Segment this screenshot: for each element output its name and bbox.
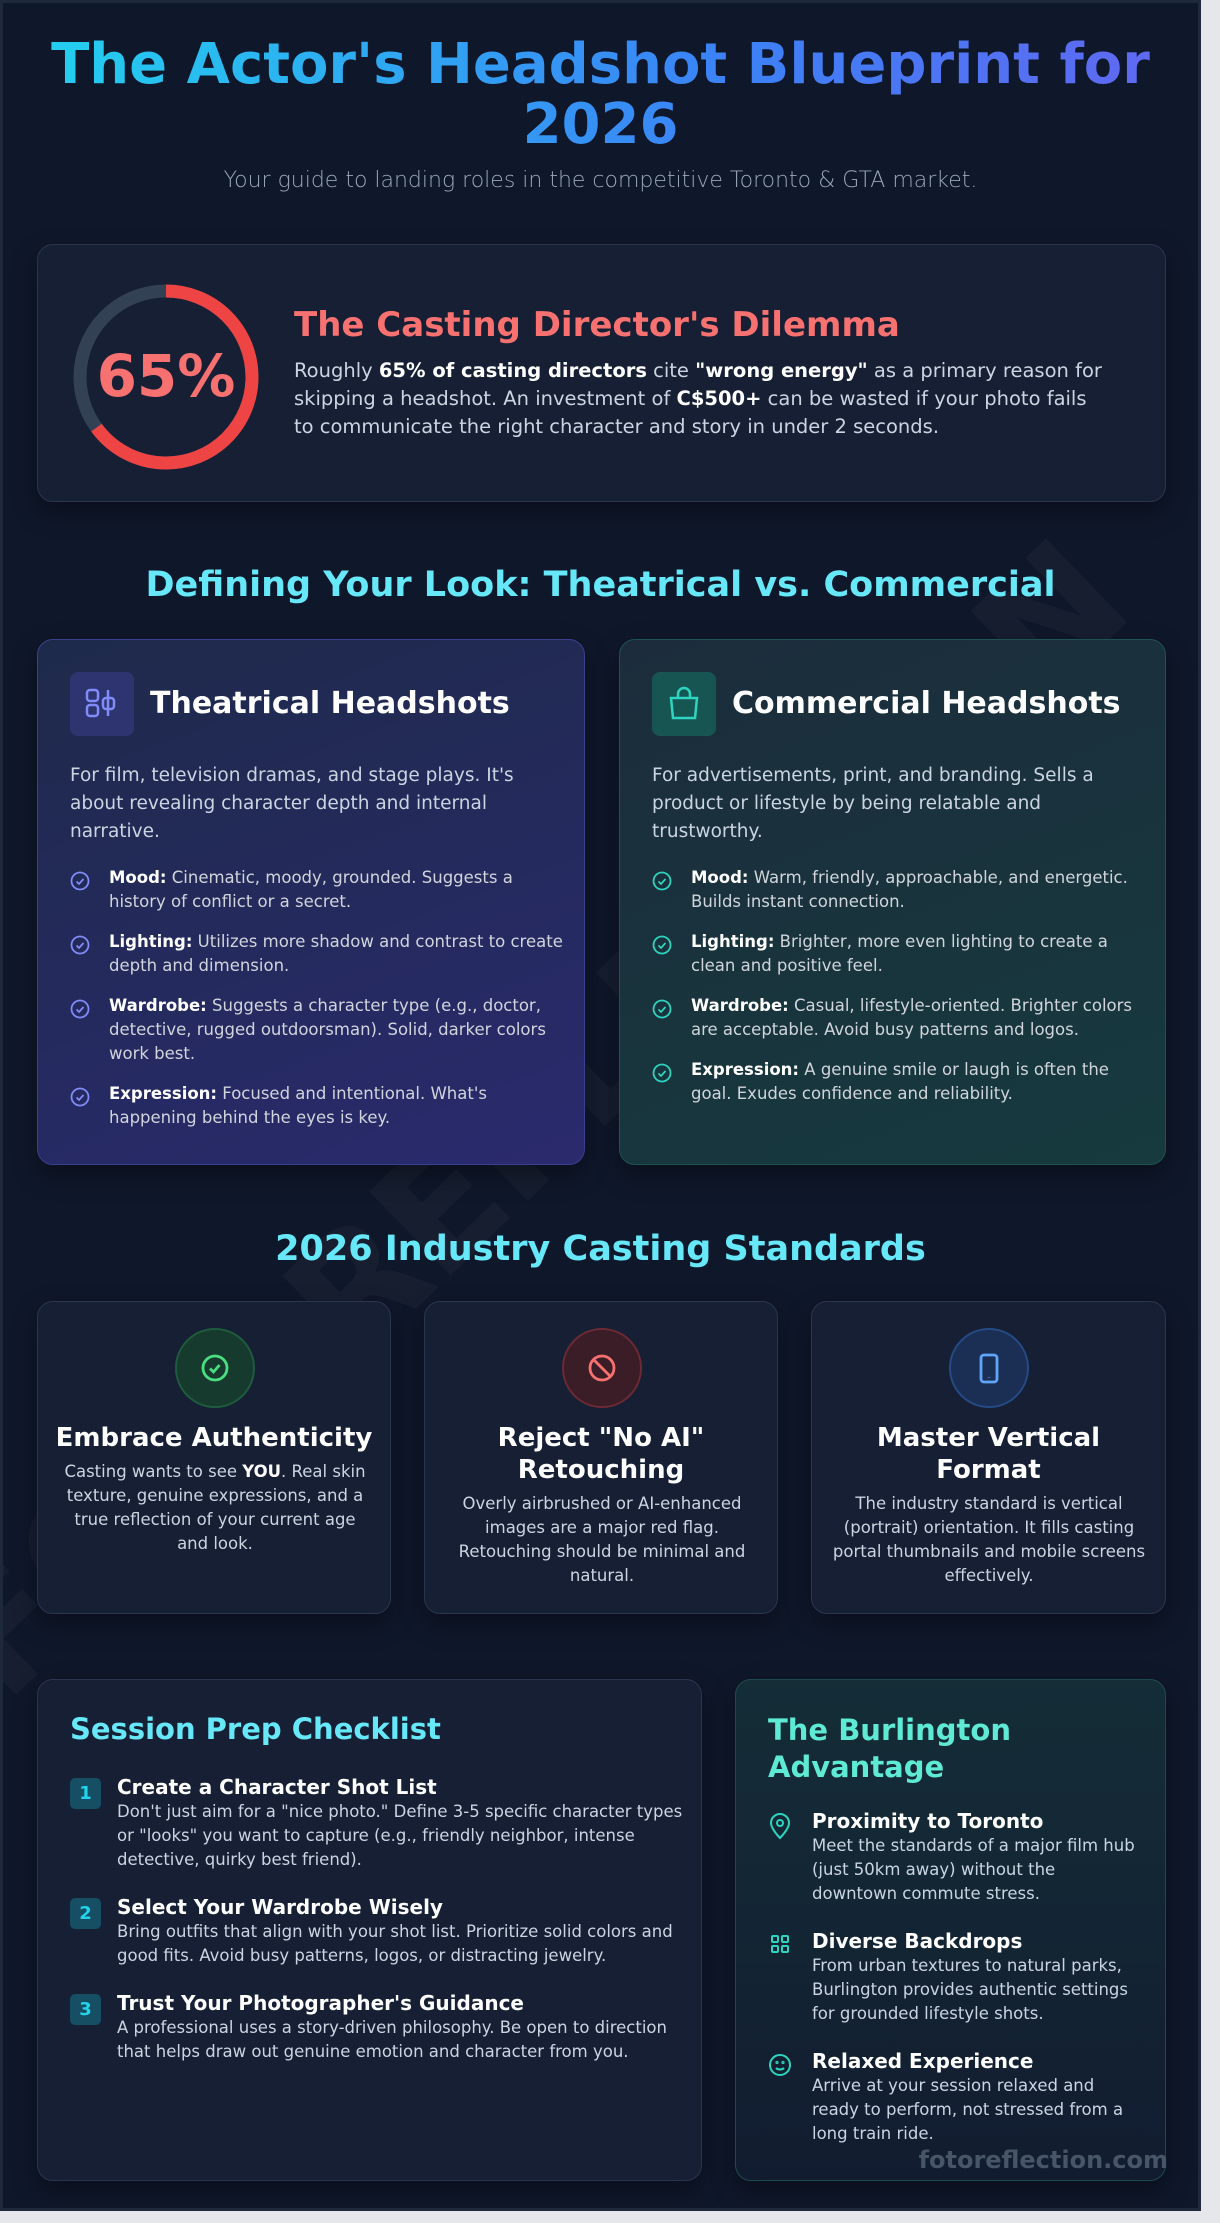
theatrical items: Wardrobe: Suggests a character type (e.g., doctor, detective, rugged outdoorsman). Solid, darker colors work best. xyxy=(109,996,546,1063)
title: Embrace Authenticity xyxy=(56,1423,372,1453)
step 3: A professional uses a story-driven philosophy. Be open to direction that helps draw out genuine emotion and character from you. xyxy=(117,2018,667,2061)
text: Casting wants to see YOU. Real skin texture, genuine expressions, and a true reflection of your current age and look. xyxy=(64,1462,366,1553)
commercial desc: For advertisements, print, and branding. Sells a product or lifestyle by being relatable and trustworthy. xyxy=(652,765,1094,842)
title: Reject "No AI" xyxy=(498,1423,704,1453)
commercial items: Lighting: Brighter, more even lighting to create a clean and positive feel. xyxy=(691,932,1108,975)
ring chart 65% xyxy=(74,284,258,470)
step 2: Bring outfits that align with your shot list. Prioritize solid colors and good fits. Avoid busy patterns, logos, or distracting jewelry. xyxy=(117,1922,673,1965)
section heading: theatrical vs commercial: Defining Your Look: Theatrical vs. Commercial xyxy=(145,565,1056,605)
item: proximity: Meet the standards of a major film hub (just 50km away) without the downtown commute stress. xyxy=(812,1836,1135,1903)
item: proximity: Proximity to Toronto xyxy=(812,1809,1043,1833)
panel: embrace authenticity xyxy=(37,1301,391,1614)
step 1: 1 xyxy=(79,1783,92,1804)
title: 2026 xyxy=(523,92,678,157)
step 3: 3 xyxy=(79,1999,92,2020)
text: Overly airbrushed or AI-enhanced images are a major red flag. Retouching should be minimal and natural. xyxy=(459,1494,745,1585)
footer: brand: fotoreflection.com xyxy=(919,2146,1168,2174)
title: Format xyxy=(936,1455,1041,1485)
panel: theatrical xyxy=(37,639,585,1165)
step 3 xyxy=(70,1991,667,2061)
step 1: Create a Character Shot List xyxy=(117,1775,437,1799)
title: The Actor's Headshot Blueprint for xyxy=(51,32,1150,97)
commercial items: Expression: A genuine smile or laugh is often the goal. Exudes confidence and reliability. xyxy=(691,1060,1109,1103)
item: relaxed: Relaxed Experience xyxy=(812,2049,1033,2073)
icon: check circle xyxy=(175,1328,255,1408)
icon: ban xyxy=(562,1328,642,1408)
title xyxy=(3,35,1198,155)
text: The industry standard is vertical (portrait) orientation. It fills casting portal thumbnails and mobile screens effectively. xyxy=(833,1494,1145,1585)
theatrical title: Theatrical Headshots xyxy=(150,686,510,721)
burlington title: Advantage xyxy=(768,1750,944,1784)
commercial items xyxy=(652,868,1132,1103)
checklist title: Session Prep Checklist xyxy=(70,1712,441,1746)
item: backdrops xyxy=(771,1929,1128,2023)
item: backdrops: Diverse Backdrops xyxy=(812,1929,1022,1953)
icon: phone xyxy=(949,1328,1029,1408)
panel: commercial xyxy=(619,639,1166,1165)
dilemma text: Roughly 65% of casting directors cite "wrong energy" as a primary reason for skipping a headshot. An investment of C$500+ can be wasted if your photo fails to communicate the right character and story in under 2 seconds. xyxy=(294,359,1102,438)
theatrical items: Expression: Focused and intentional. What's happening behind the eyes is key. xyxy=(109,1084,487,1127)
theatrical items: Lighting: Utilizes more shadow and contrast to create depth and dimension. xyxy=(109,932,563,975)
step 3: Trust Your Photographer's Guidance xyxy=(117,1991,524,2015)
commercial title: Commercial Headshots xyxy=(732,686,1121,721)
item: relaxed: Arrive at your session relaxed and ready to perform, not stressed from a long train ride. xyxy=(812,2076,1123,2143)
subtitle: Your guide to landing roles in the competitive Toronto & GTA market. xyxy=(224,168,977,193)
dilemma heading: The Casting Director's Dilemma xyxy=(294,305,900,345)
title xyxy=(498,1423,704,1485)
step 2: 2 xyxy=(79,1903,92,1924)
item: backdrops: From urban textures to natural parks, Burlington provides authentic settings for grounded lifestyle shots. xyxy=(812,1956,1128,2023)
commercial items: Mood: Warm, friendly, approachable, and energetic. Builds instant connection. xyxy=(691,868,1128,911)
burlington title xyxy=(768,1713,1011,1784)
item: proximity xyxy=(770,1809,1135,1903)
theatrical items xyxy=(70,868,563,1127)
title: Master Vertical xyxy=(877,1423,1100,1453)
panel: reject AI xyxy=(424,1301,778,1614)
burlington title: The Burlington xyxy=(768,1713,1011,1747)
step 2 xyxy=(70,1895,673,1965)
title: Retouching xyxy=(518,1455,684,1485)
panel: session prep checklist xyxy=(37,1679,702,2181)
step 2: Select Your Wardrobe Wisely xyxy=(117,1895,443,1919)
item: relaxed xyxy=(769,2049,1123,2143)
panel: vertical format xyxy=(811,1301,1166,1614)
icon: theatrical xyxy=(70,672,134,736)
icon: shopping bag xyxy=(652,672,716,736)
section heading: standards: 2026 Industry Casting Standards xyxy=(275,1229,926,1269)
panel: casting director dilemma xyxy=(37,244,1166,502)
step 1: Don't just aim for a "nice photo." Define 3-5 specific character types or "looks" you want to capture (e.g., friendly neighbor, intense detective, quirky best friend). xyxy=(117,1802,682,1869)
commercial items: Wardrobe: Casual, lifestyle-oriented. Brighter colors are acceptable. Avoid busy patterns and logos. xyxy=(691,996,1132,1039)
step 1 xyxy=(70,1775,682,1869)
theatrical items: Mood: Cinematic, moody, grounded. Suggests a history of conflict or a secret. xyxy=(109,868,513,911)
ring chart 65%: 65% xyxy=(97,342,235,410)
panel: burlington advantage xyxy=(735,1679,1166,2181)
theatrical desc: For film, television dramas, and stage plays. It's about revealing character depth and internal narrative. xyxy=(70,765,514,842)
title xyxy=(877,1423,1100,1485)
